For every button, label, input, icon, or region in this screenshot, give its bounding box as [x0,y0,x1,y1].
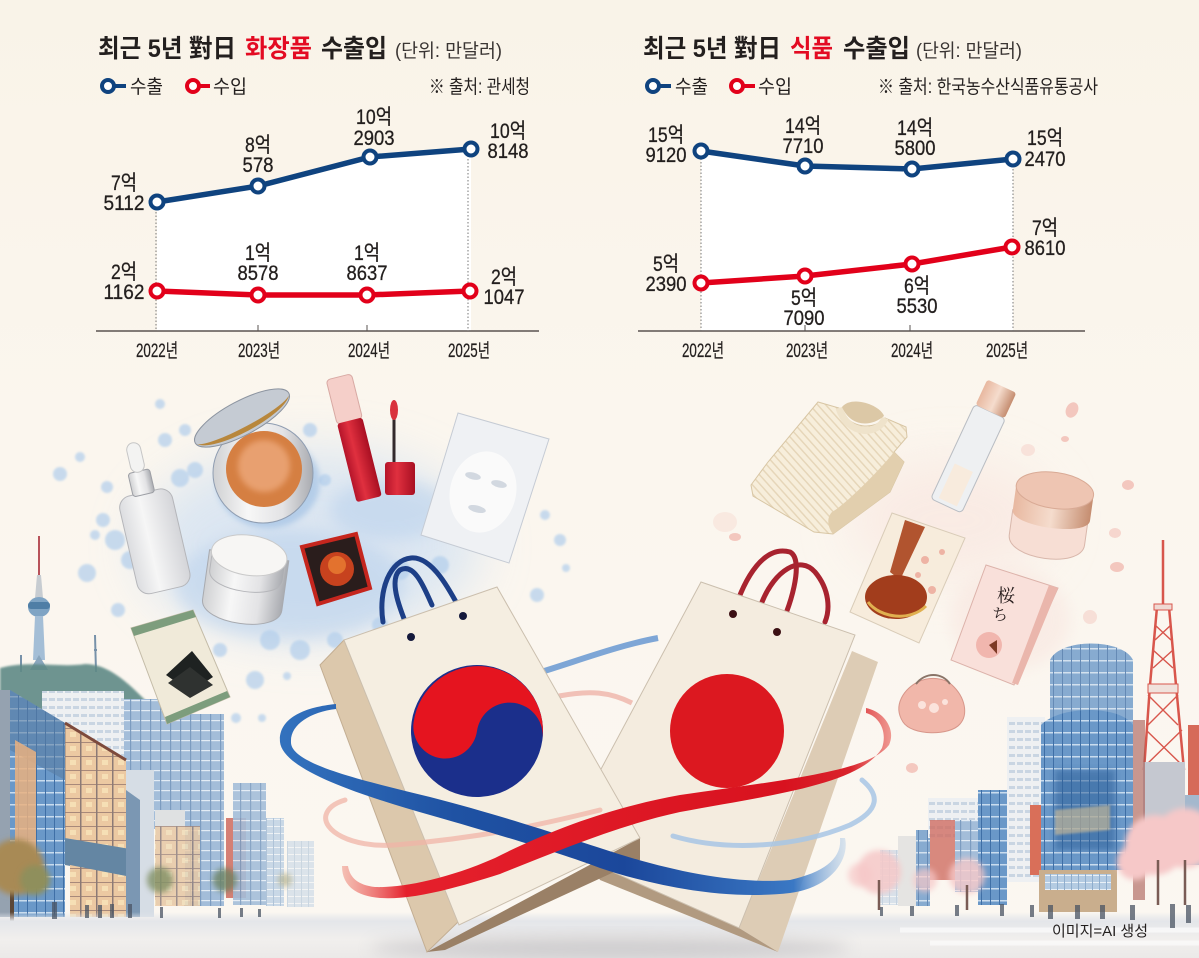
heading: food: 식품 [790,35,833,63]
ribbons behind bags [541,638,658,703]
product: pink cream jar [1007,467,1096,564]
left city: Seoul skyline [0,536,314,930]
export line [694,144,1020,176]
product: mochi box: 桜 [997,586,1015,606]
value labels: 1162 [104,281,144,304]
value labels: 10억 [490,120,526,143]
value labels: 15억 [1027,127,1063,150]
value labels: 5530 [896,295,938,318]
heading: food: (단위: 만달러) [916,40,1022,62]
legend: 수입 [213,76,247,98]
cherry trees [848,808,1199,894]
value labels: 1억 [245,242,271,265]
value labels: 15억 [648,124,684,147]
image credit: 이미지=AI 생성 [1052,923,1148,940]
export line [150,142,478,208]
value labels [646,115,1066,330]
value labels: 8610 [1024,237,1066,260]
value labels: 5억 [791,287,817,310]
crosswalk stripes [900,930,1199,943]
plot area [701,151,1013,331]
heading: cosmetics: 최근 5년 對日 [98,35,236,63]
glass storefronts [0,690,65,917]
value labels: 8148 [488,140,528,163]
value labels: 8억 [245,134,271,157]
product: mochi box: ち [992,607,1008,624]
main red ribbon [342,708,891,898]
value labels: 7억 [1032,217,1058,240]
pale red ribbon [326,800,600,845]
legend: 수출 [130,76,163,98]
value labels: 2억 [491,266,517,289]
product: cream jar [200,530,292,629]
left shopping bag: Korea [320,558,640,952]
heading: cosmetics: 수출입 [321,35,387,63]
value labels: 10억 [356,106,392,129]
value labels: 7710 [782,135,824,158]
product: serum bottle [106,437,192,596]
product: sheet mask pack [421,413,549,563]
product: seaweed pack [131,610,230,724]
axis: 2025년 [448,340,490,362]
value labels: 8637 [346,262,388,285]
heading: cosmetics: (단위: 만달러) [395,40,502,62]
value labels: 9120 [646,144,686,167]
watercolour splash: pink petals [713,400,1134,773]
cylindrical glass tower [1050,644,1133,725]
heading: food: 수출입 [843,35,910,63]
pale blue ribbon [673,780,874,845]
axis: 2022년 [682,340,724,362]
product: knit sweater [751,402,907,534]
value labels: 1047 [484,286,524,309]
value labels: 5112 [104,192,144,215]
axis: 2023년 [238,340,280,362]
source: ※ 출처: 한국농수산식품유통공사 [878,76,1098,98]
import line [150,284,476,302]
value labels: 2903 [354,127,394,150]
hill [0,664,150,720]
street tree [0,839,292,930]
chart: food trade [638,35,1098,362]
product: cushion compact [187,378,320,528]
plot area [157,149,471,331]
bag handles [733,551,828,633]
main blue ribbon [280,704,846,895]
legend: 수출 [675,76,708,98]
right shopping bag: Japan [590,551,878,952]
icon: Tokyo tower [1144,540,1184,770]
distant buildings [880,850,898,905]
product: lip tint [326,374,415,502]
icon: Namsan tower [21,536,97,672]
value labels: 5억 [653,253,679,276]
ribbons in front of bags [280,704,891,898]
axis [96,152,539,362]
heading: food [643,35,1022,63]
bag handles [382,558,463,636]
product: ramen pack [302,534,370,604]
heading: cosmetics: 화장품 [245,35,312,63]
value labels: 1억 [354,242,380,265]
value labels: 8578 [238,262,278,285]
axis: 2025년 [986,340,1028,362]
value labels: 14억 [897,117,933,140]
icon: hinomaru [670,674,784,788]
legend: 수입 [758,76,792,98]
axis: 2022년 [136,340,178,362]
product: clear bottle [931,379,1017,513]
value labels: 2억 [111,261,137,284]
value labels: 6억 [904,275,930,298]
axis [638,155,1085,362]
value labels: 14억 [785,115,821,138]
source: ※ 출처: 관세청 [429,76,530,98]
chart: cosmetics trade [96,35,539,362]
heading: cosmetics [98,35,502,63]
axis: 2024년 [891,340,933,362]
watercolour splash: blue [53,399,570,723]
heading: food: 최근 5년 對日 [643,35,781,63]
product: mochi box [951,565,1058,685]
value labels: 578 [242,154,274,177]
value labels: 5800 [894,137,936,160]
value labels: 2390 [646,273,686,296]
right city: Tokyo skyline [848,540,1199,912]
value labels: 7억 [111,172,137,195]
product: dorayaki pack [850,513,965,643]
value labels: 2470 [1024,148,1066,171]
icon: taegeuk [402,656,552,806]
ground [0,912,1199,958]
axis: 2024년 [348,340,390,362]
value labels [104,106,528,309]
legend [647,76,792,98]
axis: 2023년 [786,340,828,362]
product: coin purse [899,675,965,733]
distant buildings [226,818,246,898]
value labels: 7090 [784,307,824,330]
import line [694,240,1018,290]
legend [102,76,247,98]
pedestrians [52,902,1191,928]
